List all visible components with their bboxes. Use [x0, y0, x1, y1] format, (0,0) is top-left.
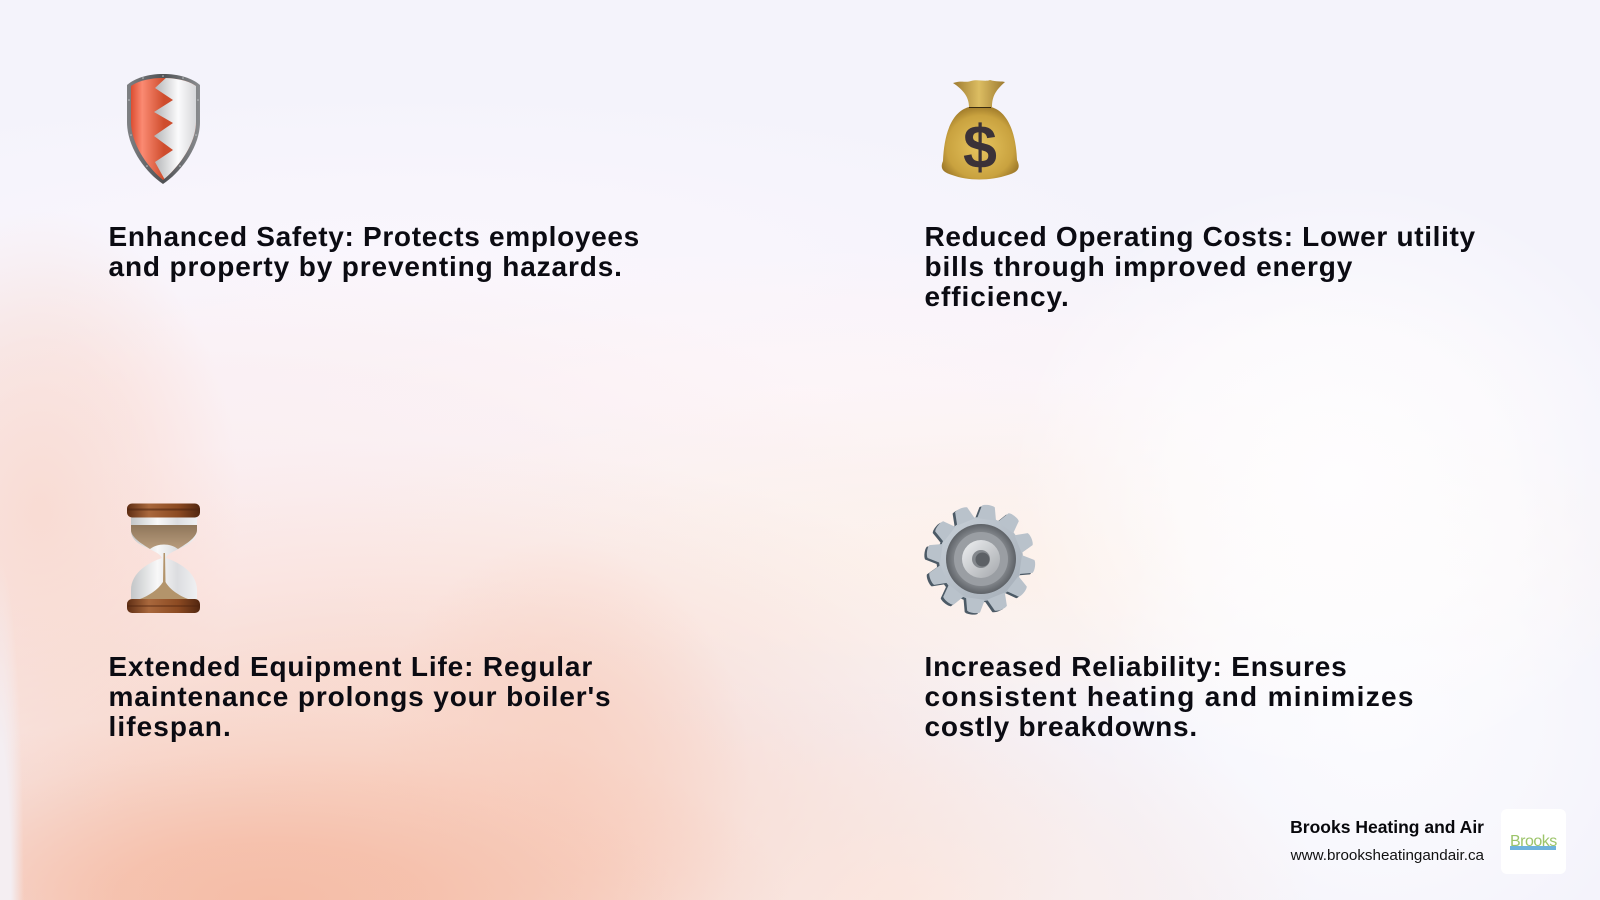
heading: enhanced safety: Enhanced Safety: Protects employees: [108, 221, 640, 252]
heading: extended equipment life: [108, 651, 612, 742]
icon: money bag: [942, 80, 1019, 181]
heading: increased reliability: [924, 651, 1415, 742]
icon: hourglass: [127, 504, 200, 613]
icon: money bag: $: [963, 113, 997, 181]
heading: extended equipment life: Extended Equipment Life: Regular: [108, 651, 593, 682]
heading: reduced operating costs: Reduced Operating Costs: Lower utility: [924, 221, 1476, 252]
heading: extended equipment life: maintenance prolongs your boiler's: [108, 681, 612, 712]
heading: extended equipment life: lifespan.: [108, 711, 232, 742]
heading: increased reliability: costly breakdowns.: [924, 711, 1198, 742]
brand name: Brooks Heating and Air: [1290, 817, 1484, 837]
heading: enhanced safety: and property by preventing hazards.: [108, 251, 623, 282]
heading: increased reliability: consistent heating and minimizes: [924, 681, 1415, 712]
icon: gear: [924, 504, 1036, 615]
website: www.brooksheatingandair.ca: [1291, 847, 1484, 864]
heading: enhanced safety: [108, 221, 640, 282]
brand block: [1290, 809, 1566, 874]
logo card: Brooks: [1510, 833, 1557, 850]
heading: reduced operating costs: [924, 221, 1476, 312]
heading: increased reliability: Increased Reliability: Ensures: [924, 651, 1348, 682]
icon: shield: [127, 74, 200, 184]
heading: reduced operating costs: efficiency.: [924, 281, 1070, 312]
heading: reduced operating costs: bills through improved energy: [924, 251, 1353, 282]
logo card: [1501, 809, 1566, 874]
